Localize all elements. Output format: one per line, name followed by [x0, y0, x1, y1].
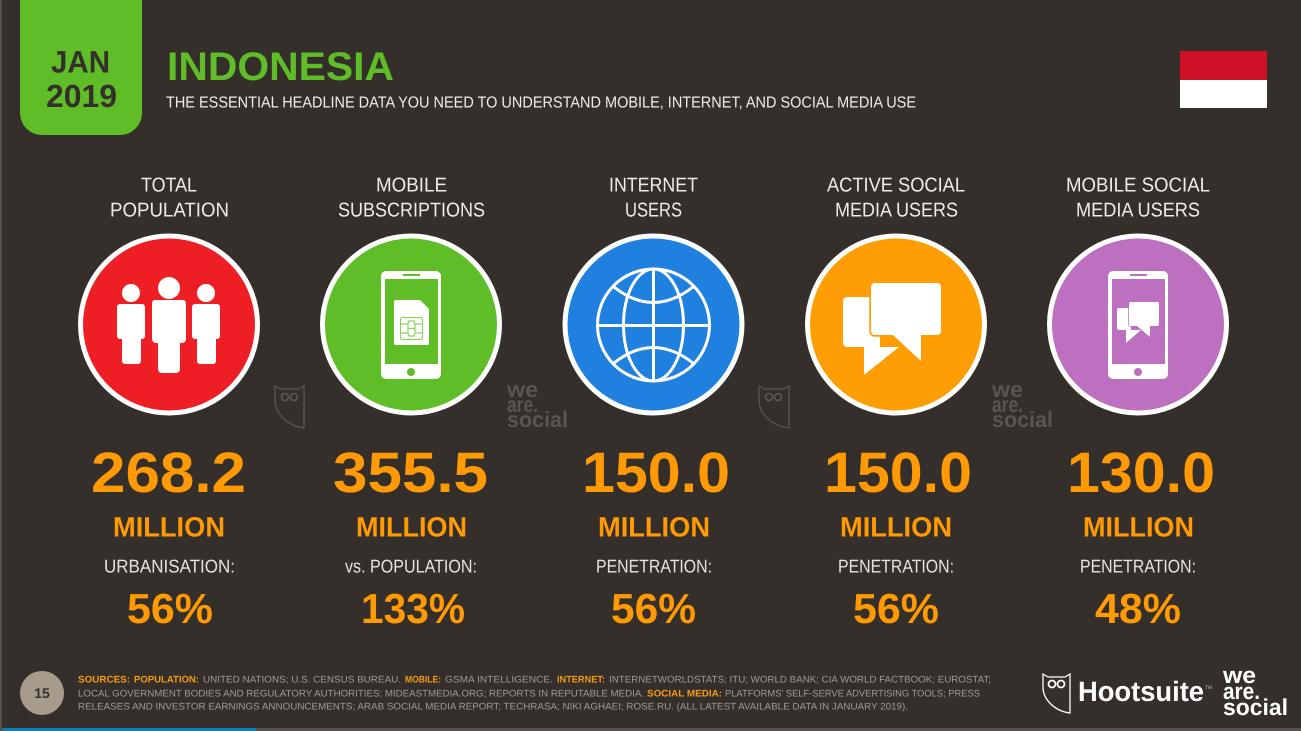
column: mobile social media users [1050, 174, 1226, 632]
heading: mobile subscriptions [338, 174, 485, 222]
logo: Hootsuite: Hootsuite [1078, 676, 1204, 707]
heading: internet users: INTERNET [609, 174, 698, 196]
title: INDONESIA [167, 45, 394, 89]
heading: mobile subscriptions: MOBILE [376, 174, 447, 196]
heading: internet users: USERS [625, 200, 682, 222]
sources: UNITED NATIONS; U.S. CENSUS BUREAU. [203, 674, 401, 686]
icon: people [80, 236, 258, 413]
date tab: 2019 [46, 78, 117, 114]
percentage: 56% [853, 585, 939, 632]
heading: total population [110, 174, 229, 222]
percentage: 48% [1095, 585, 1181, 632]
sources: MOBILE: [405, 674, 441, 686]
unit: MILLION [1083, 512, 1194, 542]
icon: speech bubbles [808, 236, 984, 413]
unit: MILLION [598, 512, 710, 542]
percentage: 133% [361, 585, 465, 632]
sources: GSMA INTELLIGENCE. [445, 674, 553, 686]
date tab [20, 0, 142, 135]
icon: phone with speech bubbles [1050, 236, 1226, 413]
subtitle: THE ESSENTIAL HEADLINE DATA YOU NEED TO UNDERSTAND MOBILE, INTERNET, AND SOCIAL MEDIA USE [166, 94, 916, 112]
sources: INTERNET: [557, 674, 605, 686]
unit: MILLION [840, 512, 952, 542]
heading: active social media users: MEDIA USERS [835, 200, 958, 222]
sources: LOCAL GOVERNMENT BODIES AND REGULATORY AUTHORITIES; MIDEASTMEDIA.ORG; REPORTS IN REPUTABLE MEDIA. [78, 688, 644, 700]
value: mobile social media users: 130.0 [1067, 441, 1215, 505]
sources: POPULATION: [134, 674, 199, 686]
value: mobile subscriptions: 355.5 [333, 441, 488, 505]
column: total population [80, 174, 258, 632]
sources: PLATFORMS' SELF-SERVE ADVERTISING TOOLS; PRESS [725, 688, 980, 700]
watermark: owl 1 [275, 386, 304, 428]
watermark: we are social 1: we [506, 377, 538, 402]
watermark: we are social 1: are. [507, 392, 538, 417]
heading: mobile social media users: MEDIA USERS [1076, 200, 1200, 222]
date tab: JAN [51, 44, 110, 80]
watermark: we are social 2: we [991, 377, 1023, 402]
percentage: 56% [611, 585, 696, 632]
heading: mobile subscriptions: SUBSCRIPTIONS [338, 200, 485, 222]
unit: MILLION [356, 512, 467, 542]
sub label: PENETRATION: [596, 556, 712, 576]
sub label: PENETRATION: [1080, 556, 1196, 576]
heading: active social media users: ACTIVE SOCIAL [827, 174, 965, 196]
logo: Hootsuite [1043, 674, 1212, 713]
sources: SOURCES: [78, 674, 130, 686]
watermark: we are social 2 [991, 377, 1053, 432]
heading: active social media users [827, 174, 965, 222]
logo: we are social: social [1223, 694, 1288, 720]
sources: RELEASES AND INVESTOR EARNINGS ANNOUNCEMENTS; ARAB SOCIAL MEDIA REPORT; TECHRASA; NIKI AGHAEI; ROSE.RU. (ALL LATEST AVAILABLE DATA IN JANUARY 2019). [78, 702, 908, 712]
icon: phone with SIM [322, 236, 500, 413]
icon: globe [565, 236, 742, 413]
value: total population: 268.2 [91, 441, 246, 505]
unit: MILLION [113, 512, 225, 542]
sub label: vs. POPULATION: [345, 556, 477, 576]
column: internet users [565, 174, 742, 632]
watermark: we are social 1 [506, 377, 568, 432]
watermark: owl 2 [759, 386, 789, 428]
value: internet users: 150.0 [582, 441, 730, 505]
watermark: we are social 2: are. [992, 392, 1023, 417]
sources [78, 674, 991, 712]
value: active social media users: 150.0 [824, 441, 972, 505]
heading: internet users [609, 174, 698, 222]
sub label: PENETRATION: [838, 556, 954, 576]
watermark: we are social 1: social [507, 407, 568, 432]
heading: mobile social media users: MOBILE SOCIAL [1066, 174, 1210, 196]
page number [20, 671, 64, 715]
column: active social media users [808, 174, 984, 632]
sources: INTERNETWORLDSTATS; ITU; WORLD BANK; CIA WORLD FACTBOOK; EUROSTAT; [609, 674, 991, 686]
logo: we are social: we [1222, 662, 1256, 688]
watermark: we are social 2: social [992, 407, 1053, 432]
sources: SOCIAL MEDIA: [647, 688, 722, 700]
heading: mobile social media users [1066, 174, 1210, 222]
column: mobile subscriptions [322, 174, 500, 632]
heading: total population: POPULATION [110, 200, 229, 222]
icon: Indonesian flag [1180, 51, 1267, 108]
logo: we are social [1222, 662, 1288, 720]
heading: total population: TOTAL [141, 174, 197, 196]
sub label: URBANISATION: [104, 556, 235, 576]
logo: Hootsuite: TM [1205, 685, 1212, 691]
logo: we are social: are. [1223, 678, 1260, 704]
page number: 15 [34, 685, 50, 701]
percentage: 56% [127, 585, 213, 632]
